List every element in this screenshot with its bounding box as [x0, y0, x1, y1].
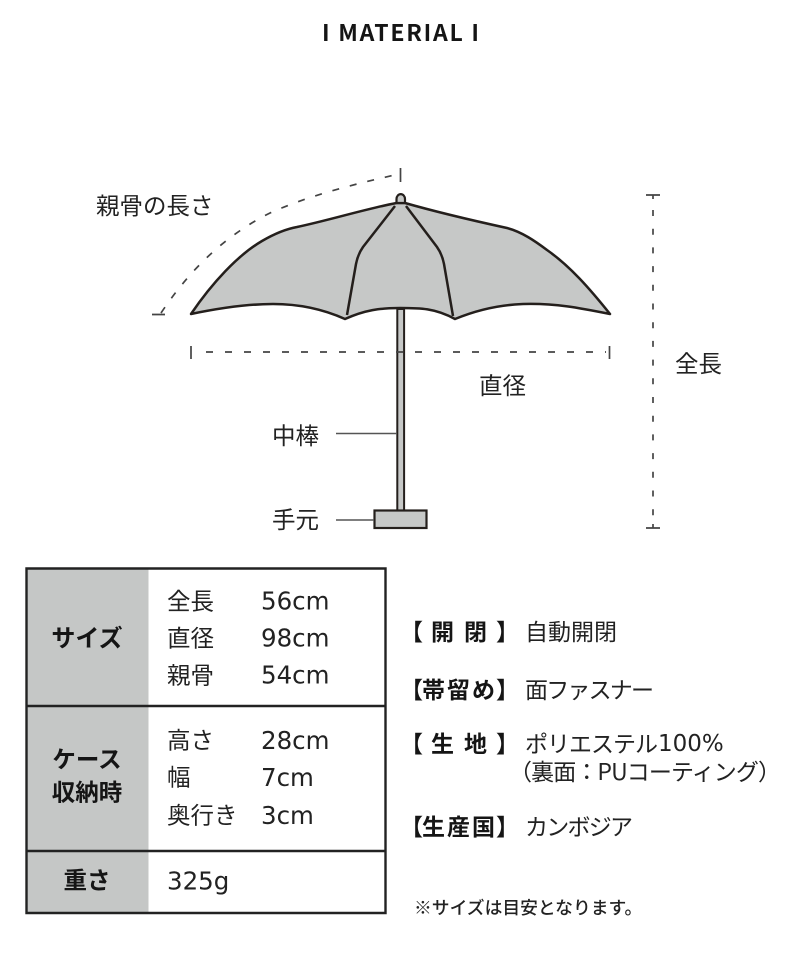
item: fabric: 生: [431, 725, 454, 759]
size values: 直径: [167, 620, 214, 654]
heading: case: ケース: [52, 740, 122, 774]
item: opening: 閉: [464, 613, 487, 647]
item: fabric: 】: [496, 725, 519, 759]
label: shaft: 中棒: [272, 417, 319, 451]
item: strap: [400, 671, 654, 705]
umbrella diagram: [96, 168, 722, 535]
dashed arc: rib length measure: [152, 168, 400, 314]
row: case: [52, 722, 330, 830]
spec table: [26, 568, 386, 913]
case values: 幅: [167, 758, 190, 792]
umbrella shaft: [397, 309, 404, 511]
row: size: [51, 582, 330, 690]
case values: 28cm: [261, 726, 330, 755]
case values: 高さ: [167, 722, 214, 756]
heading: size: サイズ: [51, 618, 123, 654]
item: opening: [400, 613, 617, 647]
item: strap: 面ファスナー: [525, 671, 654, 705]
item: country: カンボジア: [525, 808, 633, 842]
table frame: [26, 568, 386, 913]
item: opening: 】: [496, 613, 519, 647]
label: total length: 全長: [675, 345, 722, 379]
item: fabric: ポリエステル: [525, 725, 658, 759]
item: fabric: [400, 725, 781, 787]
item: country: [400, 808, 633, 842]
size values: 54cm: [261, 660, 330, 690]
item: fabric: （裏面：PUコーティング）: [509, 753, 781, 787]
material list: [400, 613, 781, 920]
umbrella canopy: [191, 203, 610, 319]
item: opening: 自動開閉: [525, 613, 617, 647]
item: country: 生産国: [422, 808, 495, 842]
note: ※サイズは目安となります。: [414, 894, 642, 920]
case values: 奥行き: [167, 796, 238, 830]
label: diameter: 直径: [479, 367, 526, 401]
size values: 全長: [167, 582, 214, 616]
size values: [167, 582, 330, 690]
table header column: [27, 569, 148, 913]
label: rib length: 親骨の長さ: [96, 187, 214, 221]
item: opening: 開: [431, 613, 454, 647]
item: country: 【: [400, 808, 423, 842]
item: fabric: 【: [400, 725, 423, 759]
heading: case: 収納時: [52, 774, 122, 808]
item: strap: 【: [400, 671, 423, 705]
item: strap: 】: [496, 671, 519, 705]
umbrella top knob: [396, 194, 405, 203]
leader line: handle: [336, 519, 374, 521]
total length dashed line: [646, 195, 660, 528]
umbrella handle: [374, 510, 426, 528]
size values: 98cm: [261, 624, 330, 652]
item: opening: 【: [400, 613, 423, 647]
title: I MATERIAL I: [322, 14, 479, 48]
case values: 3cm: [261, 801, 314, 830]
case values: 7cm: [261, 763, 314, 792]
umbrella ribs: [347, 206, 453, 316]
weight value: 325g: [167, 866, 229, 896]
heading: case: [52, 740, 122, 808]
label: handle: 手元: [272, 501, 319, 535]
item: fabric: 100%: [658, 731, 724, 757]
size values: 親骨: [167, 656, 214, 690]
case values: [167, 722, 330, 830]
size values: 56cm: [261, 586, 330, 616]
item: strap: 帯留め: [422, 671, 495, 705]
item: country: 】: [496, 808, 519, 842]
leader line: shaft: [336, 432, 397, 434]
heading: weight: 重さ: [64, 862, 110, 896]
row: weight: [64, 862, 229, 896]
item: fabric: 地: [464, 725, 487, 759]
diameter dashed line: [191, 346, 610, 359]
